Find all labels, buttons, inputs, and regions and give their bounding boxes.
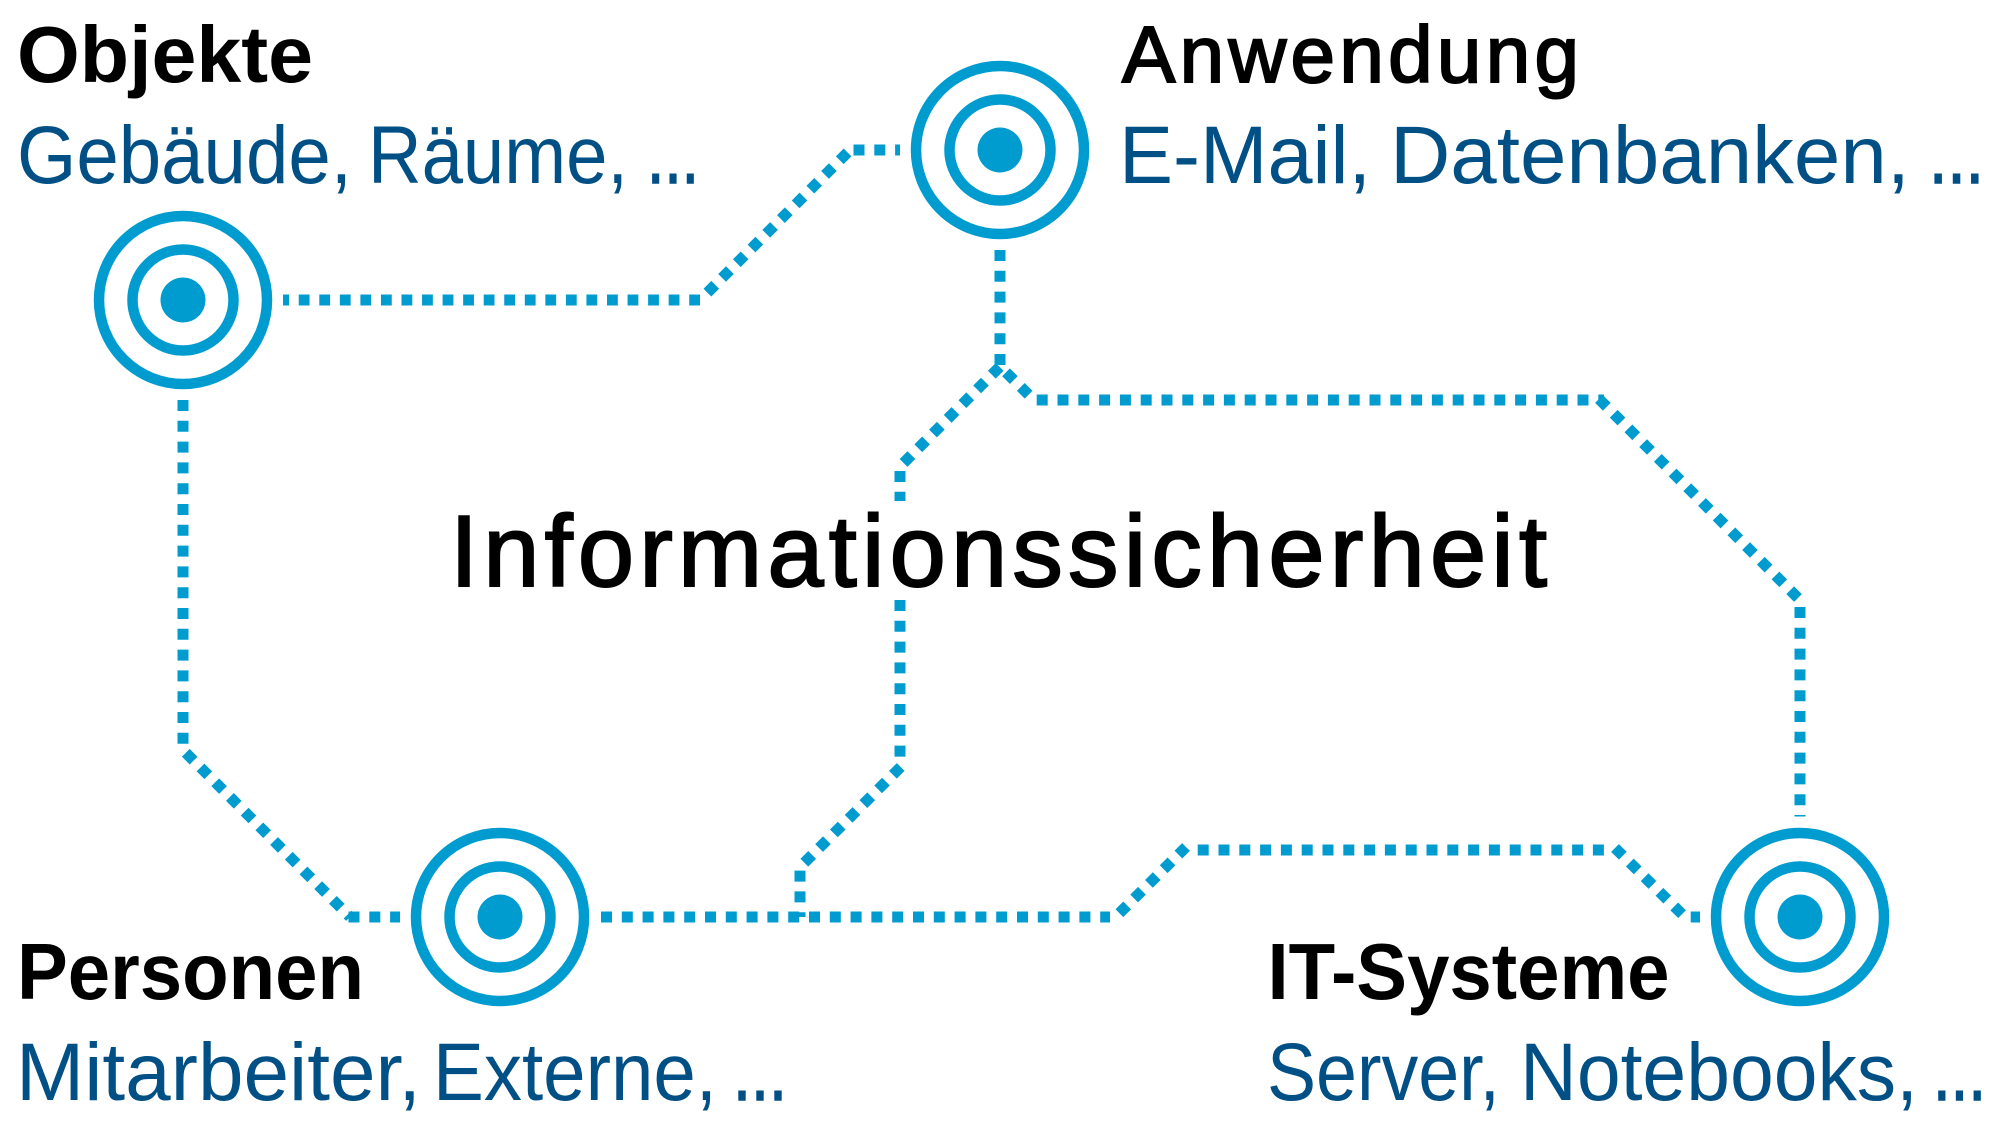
icon: target node IT-Systeme <box>1716 833 1884 1001</box>
text: Anwendung examples <box>1119 110 1984 201</box>
text: IT-Systeme examples: ... <box>1933 1027 1986 1118</box>
heading: Anwendung: Anwendung <box>1122 10 1579 99</box>
connector: Objekte to Anwendung <box>283 150 900 300</box>
text: Personen examples: Externe, <box>433 1027 717 1118</box>
heading: Informationssicherheit: Informationssicherheit <box>450 496 1547 608</box>
connector: Anwendung to Personen line <box>800 250 1000 917</box>
text: Anwendung examples: Datenbanken, <box>1390 110 1910 201</box>
text: IT-Systeme examples <box>1267 1027 1986 1118</box>
connector: Objekte to Personen <box>183 400 400 917</box>
connector: Anwendung to IT-Systeme <box>1006 372 1800 816</box>
heading: Objekte: Objekte <box>17 10 313 99</box>
text: Objekte examples: ... <box>647 110 699 201</box>
text: Anwendung examples: ... <box>1929 110 1984 201</box>
text: Objekte examples <box>17 110 699 201</box>
text: Objekte examples: Gebäude, <box>17 110 352 201</box>
heading: Personen: Personen <box>17 927 364 1016</box>
icon: target node Objekte <box>99 216 267 384</box>
connector: Personen to IT-Systeme <box>601 847 1700 917</box>
icon: target node Personen <box>416 833 584 1001</box>
text: Personen examples: Mitarbeiter, <box>16 1027 421 1118</box>
text: Personen examples <box>16 1027 787 1118</box>
icon: target node Anwendung <box>916 66 1084 234</box>
text: Anwendung examples: E-Mail, <box>1119 110 1371 201</box>
text: IT-Systeme examples: Server, <box>1267 1027 1500 1118</box>
text: Objekte examples: Räume, <box>368 110 628 201</box>
heading: IT-Systeme: IT-Systeme <box>1268 927 1670 1016</box>
text: IT-Systeme examples: Notebooks, <box>1520 1027 1918 1118</box>
text: Personen examples: ... <box>733 1027 787 1118</box>
